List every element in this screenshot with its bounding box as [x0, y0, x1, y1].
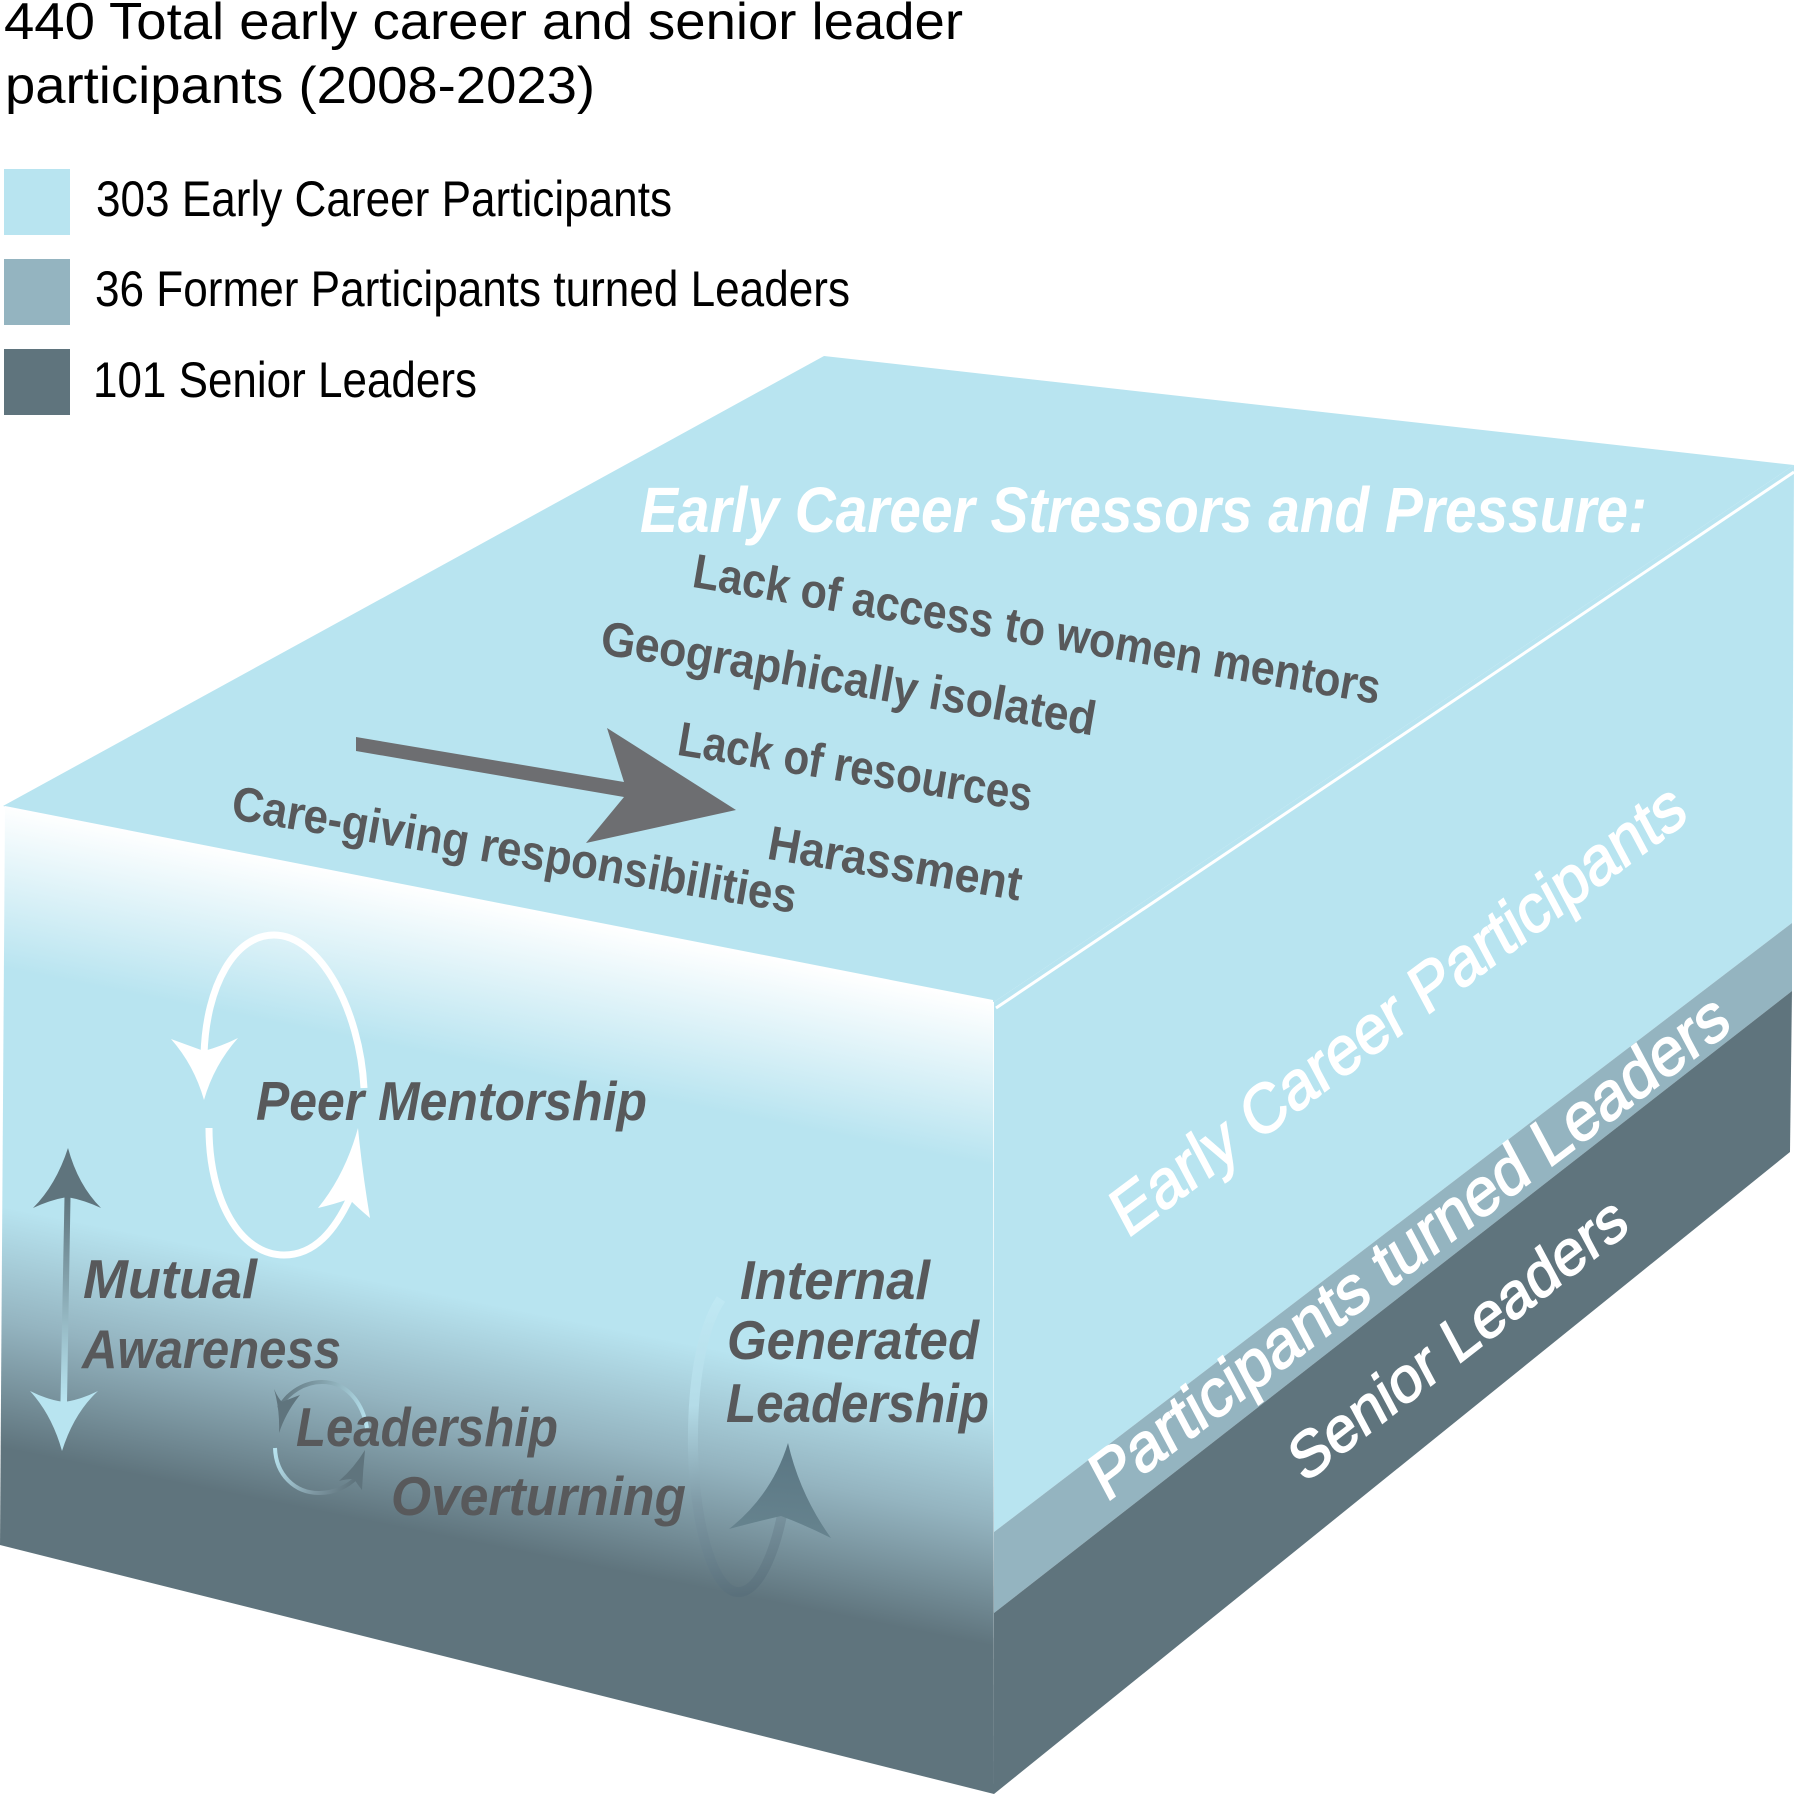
- stressor: care-giving: Care-giving responsibilities: [232, 775, 796, 924]
- label: leadership overturning: Leadership: [296, 1396, 558, 1458]
- label: early career participants: Early Career Participants: [1099, 766, 1697, 1252]
- title: participants (2008-2023): [5, 57, 595, 115]
- label: leadership overturning: [296, 1396, 686, 1527]
- label: participants turned leaders: Participants turned Leaders: [1078, 976, 1740, 1515]
- arrow: stressors pressing: [356, 728, 736, 843]
- legend item: senior leaders: 101 Senior Leaders: [93, 352, 477, 408]
- legend item: former participants: 36 Former Participants turned Leaders: [95, 261, 850, 317]
- icon: leadership overturning loop: [274, 1382, 367, 1493]
- stressor: harassment: Harassment: [768, 815, 1023, 912]
- stressor list: [232, 543, 1380, 924]
- panel: block right face: [994, 465, 1794, 1794]
- label: leadership overturning: Overturning: [391, 1465, 686, 1527]
- label: mutual awareness: [80, 1248, 341, 1380]
- label: internal generated leadership: Leadership: [726, 1372, 989, 1434]
- icon: internal generated leadership loop: [693, 1299, 831, 1592]
- legend item: early career: 303 Early Career Participants: [96, 171, 672, 227]
- label: senior leaders: Senior Leaders: [1278, 1182, 1638, 1496]
- panel: block top face: [3, 356, 1794, 1008]
- title: [4, 0, 963, 115]
- icon: peer mentorship loop: [171, 935, 370, 1255]
- label: internal generated leadership: [726, 1249, 989, 1434]
- legend item: senior leaders: [4, 349, 477, 415]
- label: internal generated leadership: Generated: [727, 1309, 980, 1371]
- label: peer mentorship: Peer Mentorship: [256, 1070, 647, 1132]
- legend item: early career: [4, 169, 672, 235]
- legend item: former participants: [4, 259, 850, 325]
- stressor: mentors: Lack of access to women mentors: [693, 543, 1380, 715]
- stressor: resources: Lack of resources: [678, 711, 1032, 823]
- icon: mutual awareness double arrow: [30, 1148, 101, 1451]
- label: mutual awareness: Mutual: [83, 1248, 259, 1310]
- label: mutual awareness: Awareness: [80, 1318, 341, 1380]
- label: internal generated leadership: Internal: [740, 1249, 932, 1311]
- heading: stressors: Early Career Stressors and Pressure:: [640, 474, 1647, 546]
- legend: [4, 169, 850, 415]
- stressor: isolated: Geographically isolated: [601, 610, 1096, 747]
- panel: block front face: [0, 806, 994, 1794]
